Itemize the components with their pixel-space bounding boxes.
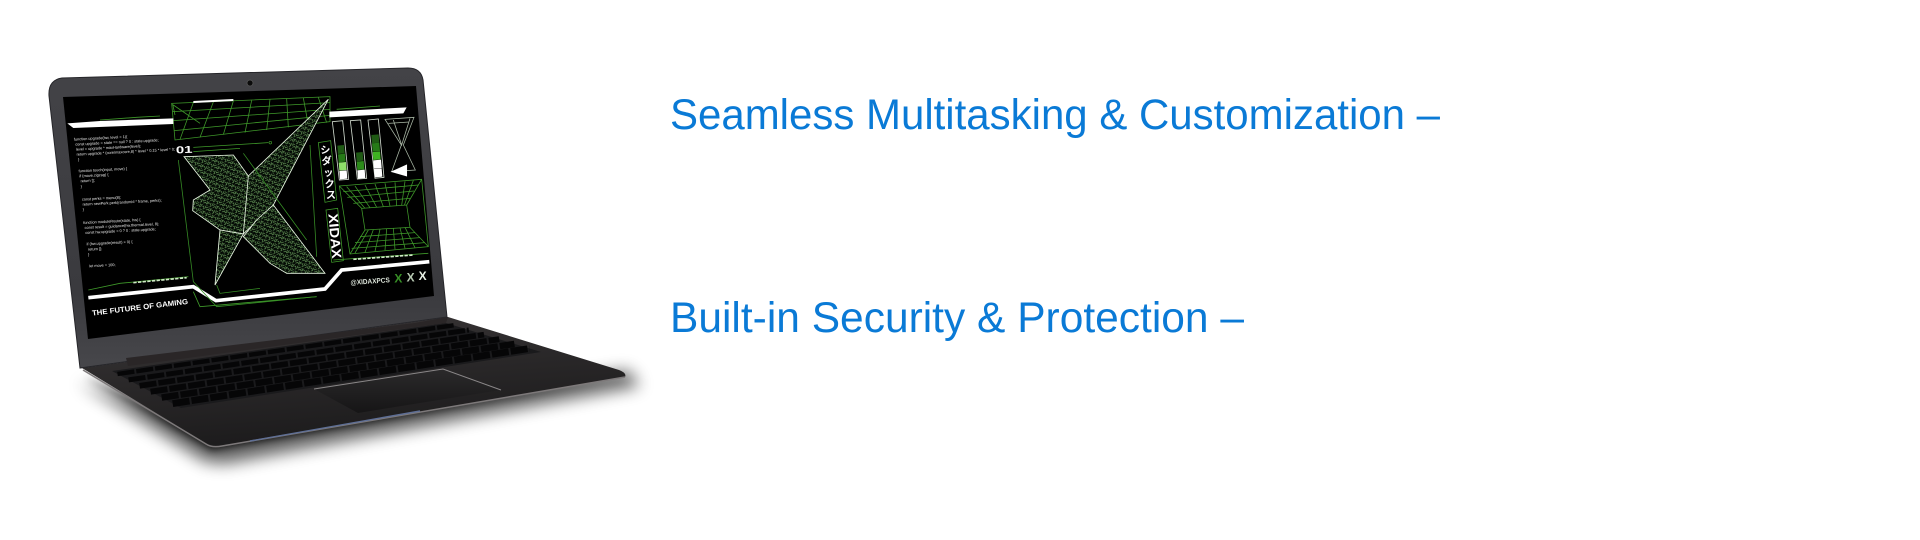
code lines: if (move.zigzag) { (79, 173, 109, 178)
handle: @XIDAXPCS (350, 277, 390, 287)
keyboard keys (118, 325, 530, 404)
code lines: level = upgrade * maxHardware(level); (76, 144, 141, 152)
tunnel grid (339, 179, 428, 254)
laptop (49, 68, 640, 464)
code lines: const perks = menu(8); (82, 196, 121, 202)
code lines: return upgrade * (core/maxcore,8) * level * 0.15 * level * 0; (77, 148, 175, 157)
code lines: return []; (88, 247, 102, 252)
code lines: const hw.upgrade = 0 ? 0 : state.upgrade; (85, 227, 156, 235)
screen background (63, 86, 434, 339)
hourglass icon (385, 117, 415, 176)
laptop base (82, 317, 625, 447)
code lines: return []; (81, 179, 95, 183)
laptop lid (49, 68, 448, 368)
code lines: if (hw.upgrade(result) > 0) { (87, 240, 133, 246)
code lines (74, 135, 175, 268)
code lines: const result = guidance(hw.thermal.level, 8); (85, 222, 159, 230)
code lines: function upgrade(hw, level = 1){ (74, 135, 128, 142)
level bars (332, 119, 384, 180)
keyboard well (112, 323, 541, 408)
webcam (247, 80, 253, 86)
code lines: let move = 100; (89, 263, 116, 268)
white interface bars (67, 106, 429, 307)
code lines: } (81, 184, 83, 188)
number 01: 01 (176, 145, 193, 156)
code lines: function moduleRoute(state, hw) { (83, 218, 141, 225)
touchpad (314, 369, 501, 413)
small X logos: X (394, 272, 402, 286)
heading: security: Built-in Security & Protection – (670, 294, 1244, 342)
X frame lines (178, 145, 317, 307)
code lines: return newPerk.perk(randomId * frame, perks); (83, 199, 162, 207)
code lines: } (88, 253, 90, 257)
code lines: const upgrade = state == null ? 0 : state.upgrade; (75, 138, 159, 147)
top grid (172, 97, 330, 140)
laptop shadow (78, 370, 640, 464)
tagline: THE FUTURE OF GAMING (91, 297, 189, 318)
katakana label: シダックス (320, 145, 336, 202)
small X logos: X (407, 271, 415, 285)
code lines: } (78, 158, 80, 162)
XIDAX label: XIDAX (325, 213, 344, 259)
screen artwork (67, 97, 429, 318)
small X logos: X (419, 269, 427, 283)
small X logos (394, 272, 426, 282)
heading: multitasking: Seamless Multitasking & Customization – (670, 91, 1440, 139)
code lines: function touch(input, move) { (79, 167, 128, 173)
big X emblem (184, 99, 328, 285)
front edge highlight (83, 370, 625, 447)
code lines: } (83, 208, 85, 212)
